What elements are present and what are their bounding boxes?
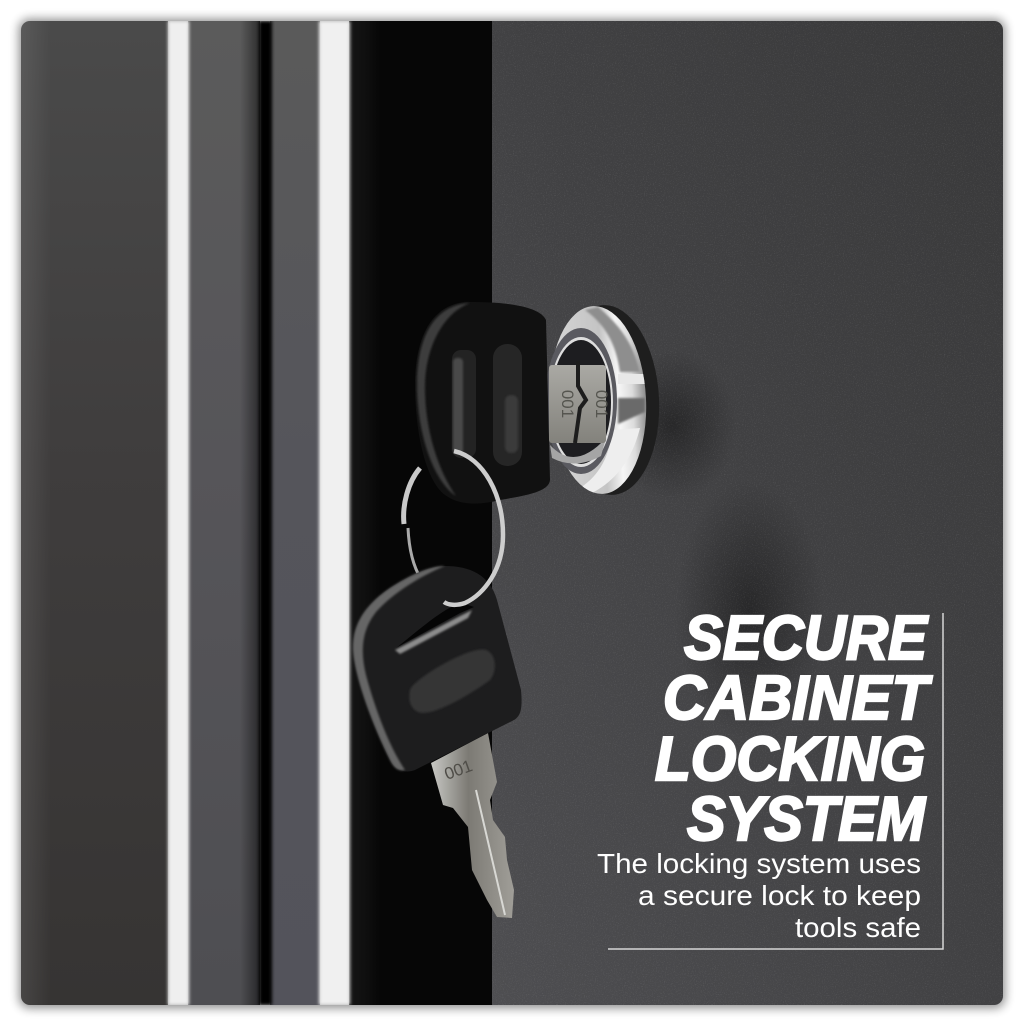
description text: tools safe [795,912,921,943]
cabinet left door bands [21,21,492,1005]
description text: a secure lock to keep [638,880,921,911]
callout frame [608,613,943,949]
lock cylinder [545,302,664,498]
heading [655,604,933,854]
key ring: rear arc [404,468,421,579]
upper key head [415,302,550,504]
description text: The locking system uses [597,848,921,879]
heading: SECURE [684,604,929,673]
heading: LOCKING [655,725,925,794]
lower key head [353,566,522,772]
lower key blade [431,733,514,918]
key ring: front arc [444,451,503,605]
heading: CABINET [663,664,933,733]
key blade in lock [549,365,608,443]
key blade in lock: 001 [592,390,611,418]
lower key blade: 001 [442,756,475,784]
description text [597,848,921,943]
heading: SYSTEM [687,785,926,854]
cabinet right door surface [492,21,1003,1005]
key blade in lock: 001 [558,390,577,418]
chrome reflections [580,307,645,494]
